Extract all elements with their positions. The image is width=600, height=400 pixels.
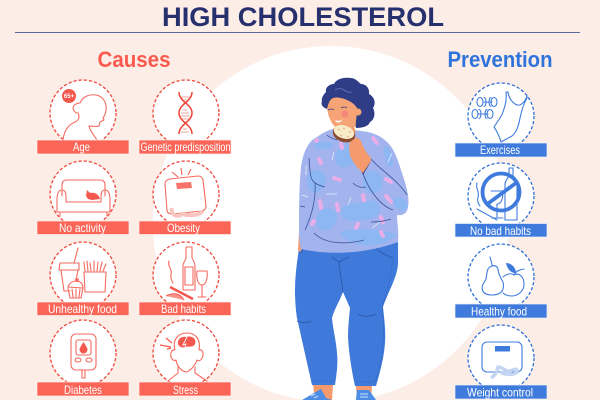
- cause: obesity: [139, 161, 231, 235]
- cause: no activity: No activity: [59, 221, 106, 235]
- prevention: exercises: [455, 83, 547, 157]
- figure: woman eating donut: [295, 78, 409, 400]
- cause: unhealthy food: Unhealthy food: [48, 302, 117, 316]
- title: HIGH CHOLESTEROL: [162, 2, 444, 32]
- prevention: exercises: Exercises: [480, 143, 520, 157]
- cause: bad habits: [139, 242, 231, 316]
- cause: age: [37, 80, 129, 154]
- cause: diabetes: [37, 320, 129, 397]
- cause: bad habits: Bad habits: [161, 302, 206, 316]
- neck and face: [333, 122, 356, 140]
- cause: diabetes: Diabetes: [64, 383, 102, 397]
- panel: causes: [37, 80, 231, 397]
- cause: unhealthy food: [37, 242, 129, 316]
- cause: age: Age: [73, 140, 90, 154]
- cause: no activity: [37, 161, 129, 235]
- donut: [331, 123, 357, 145]
- prevention: healthy food: Healthy food: [471, 304, 527, 318]
- prevention: weight control: Weight control: [467, 386, 533, 400]
- cause: stress: [139, 320, 231, 397]
- prevention: healthy food: [455, 244, 547, 318]
- cause: genetic predisposition: Genetic predisposition: [140, 140, 230, 154]
- cause: obesity: Obesity: [167, 221, 200, 235]
- panel: prevention: [455, 83, 547, 400]
- sweater: [299, 129, 409, 253]
- prevention: no bad habits: [455, 163, 547, 238]
- cause: genetic predisposition: [139, 80, 231, 154]
- cause: stress: Stress: [173, 383, 198, 397]
- hair: [322, 78, 375, 128]
- heading: prevention: Prevention: [448, 47, 552, 72]
- prevention: weight control: [455, 325, 547, 400]
- feet and shoes: [313, 385, 372, 400]
- cause: age: 65+: [64, 94, 75, 100]
- left hand: [298, 232, 304, 252]
- hand: [349, 137, 371, 173]
- prevention: no bad habits: No bad habits: [470, 224, 531, 238]
- legs: jeans: [295, 240, 398, 386]
- heading: causes: Causes: [98, 47, 170, 72]
